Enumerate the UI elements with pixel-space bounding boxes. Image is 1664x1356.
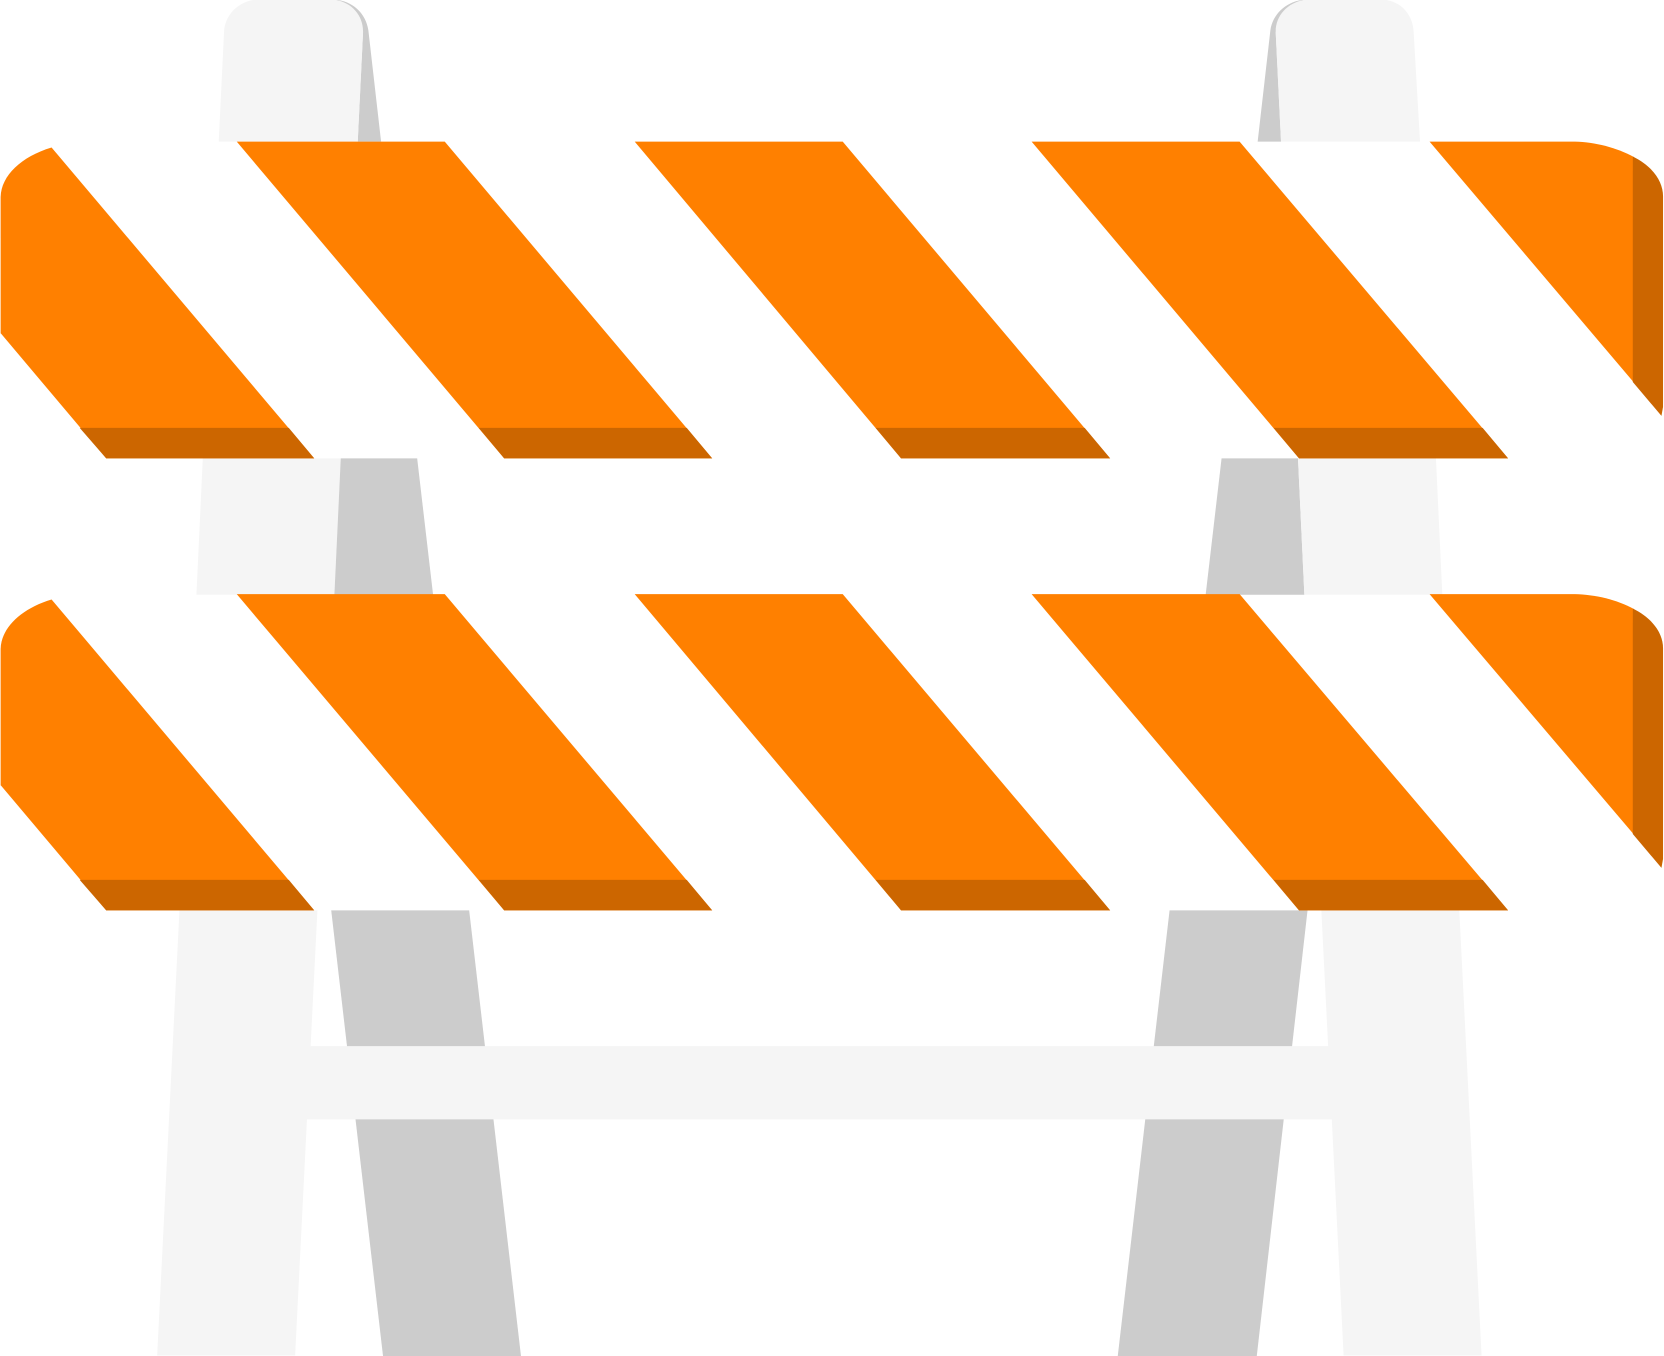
stripe: left end [1,147,314,458]
stripe: right end [1430,142,1634,383]
stripe 1 [237,594,712,910]
stripe 1 [237,142,712,458]
lower crossbar [301,1046,1339,1119]
right post: upper cap [1258,0,1420,142]
stripe 3 [1032,594,1508,910]
stripe: right end [1430,594,1634,835]
upper striped board [1,142,1663,458]
lower striped board [1,594,1663,910]
stripe 2 [635,142,1110,458]
stripe: left end [1,599,314,910]
right post: lower legs [1118,910,1482,1356]
stripe 3 [1032,142,1508,458]
right post: middle section [1206,458,1442,595]
stripe 2 [635,594,1110,910]
left post: upper cap [219,0,381,142]
left post: middle section [196,458,433,595]
left post: lower legs [157,910,521,1356]
